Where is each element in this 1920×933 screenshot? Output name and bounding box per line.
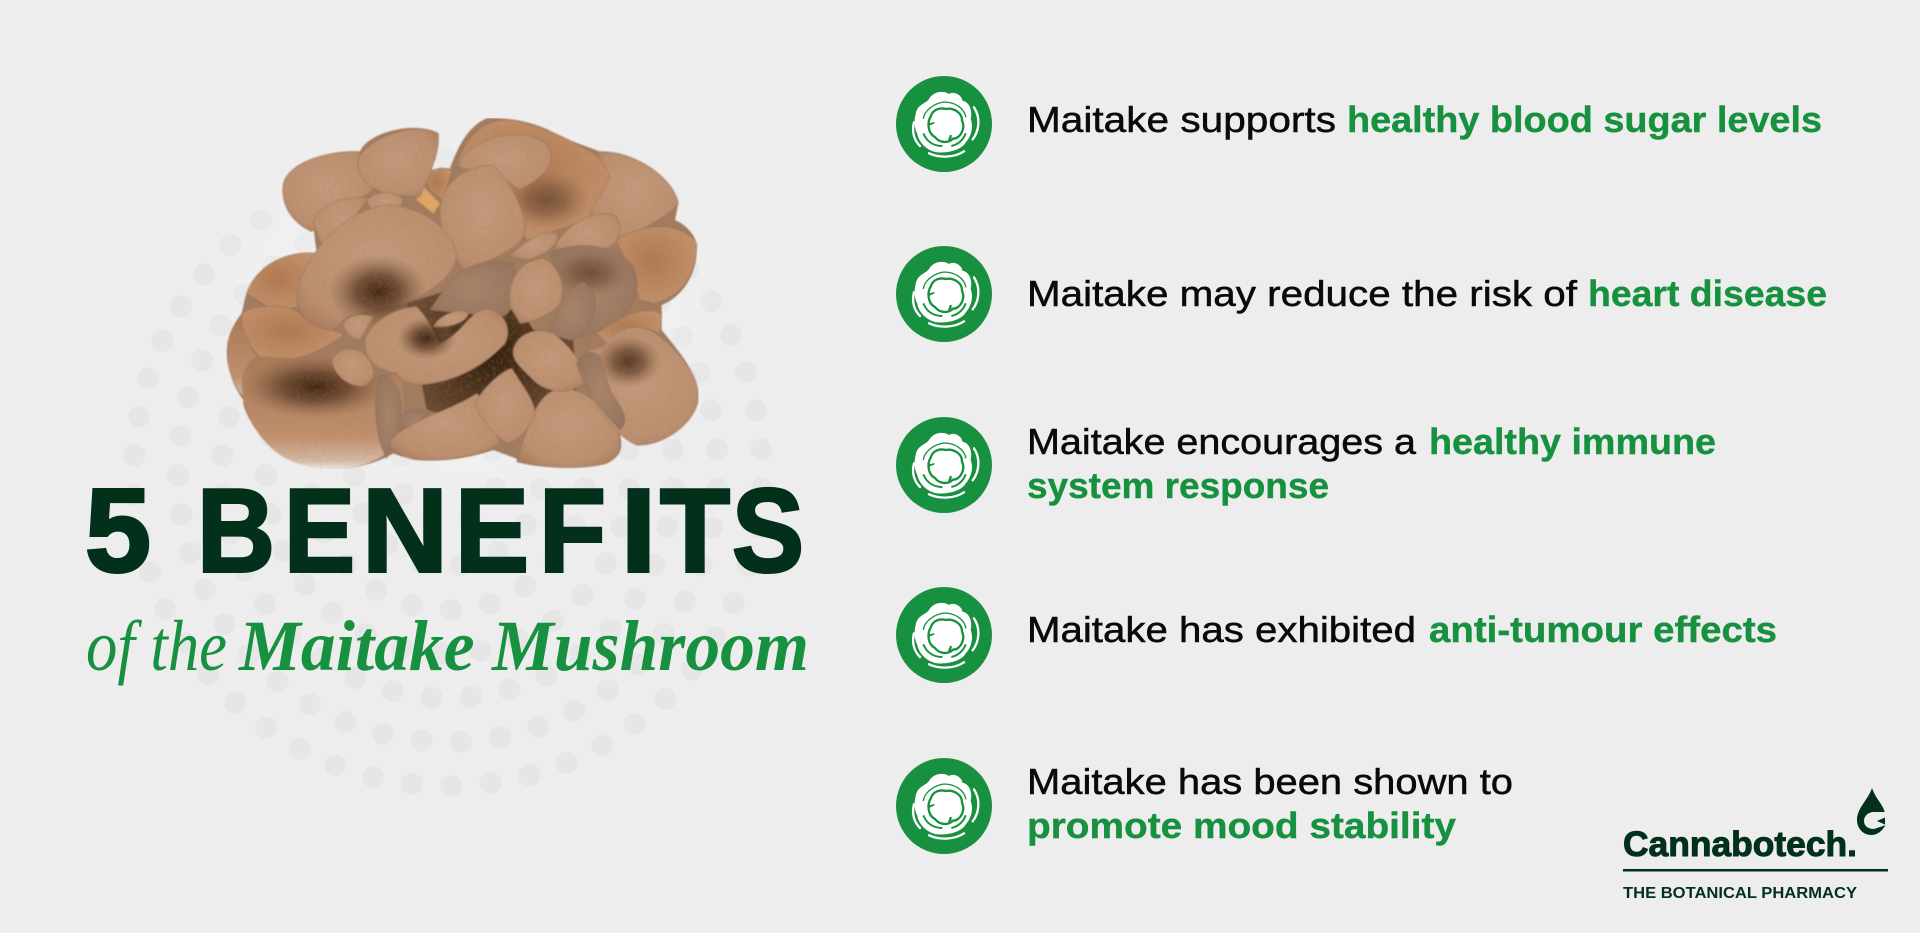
benefit 5 text: promote mood stability — [1027, 805, 1456, 846]
title: E — [284, 464, 355, 598]
icon: mushroom badge 3 — [896, 417, 992, 513]
title: F — [539, 464, 606, 598]
benefit 4 text: anti-tumour effects — [1429, 609, 1777, 650]
icon: mushroom badge 1 — [896, 76, 992, 172]
benefit 4 text: Maitake has exhibited — [1027, 609, 1416, 650]
subtitle: Maitake Mushroom — [238, 606, 809, 686]
benefit 4 — [896, 587, 1777, 683]
title: S — [732, 464, 804, 598]
title — [85, 464, 804, 598]
logo: Cannabotech — [1623, 788, 1888, 902]
title: T — [660, 464, 730, 598]
benefit 5 text: Maitake has been shown to — [1027, 761, 1513, 802]
benefit 1 text: healthy blood sugar levels — [1347, 99, 1822, 140]
title: E — [455, 464, 529, 598]
benefit 3 text: Maitake encourages a — [1027, 421, 1417, 462]
benefit 1 text — [1027, 99, 1822, 140]
title: I — [620, 464, 656, 598]
benefit 3 text: system response — [1027, 465, 1329, 506]
benefit 3 text: healthy immune — [1429, 421, 1716, 462]
benefit 5 text — [1027, 761, 1513, 846]
benefit 1 — [896, 76, 1822, 172]
concentric dot pattern — [134, 158, 762, 786]
icon: mushroom badge 4 — [896, 587, 992, 683]
benefit 1 text: Maitake supports — [1027, 99, 1336, 140]
title: 5 — [85, 464, 151, 598]
icon: mushroom badge 2 — [896, 246, 992, 342]
benefit 4 text — [1027, 609, 1777, 650]
benefit 2 text: heart disease — [1588, 273, 1827, 314]
benefit 5 — [896, 758, 1513, 854]
brand name: Cannabotech. — [1623, 825, 1857, 864]
mushroom illustration — [200, 107, 733, 507]
subtitle: of the — [86, 606, 227, 686]
benefit 2 — [896, 246, 1827, 342]
benefit 2 text — [1027, 273, 1827, 314]
benefit 2 text: Maitake may reduce the risk of — [1027, 273, 1578, 314]
benefit 3 text — [1027, 421, 1716, 506]
icon: mushroom badge 5 — [896, 758, 992, 854]
tagline: THE BOTANICAL PHARMACY — [1623, 885, 1858, 902]
title: N — [362, 464, 448, 598]
icon: logo drop — [1857, 788, 1886, 835]
title: B — [197, 464, 275, 598]
benefit 3 — [896, 417, 1716, 513]
